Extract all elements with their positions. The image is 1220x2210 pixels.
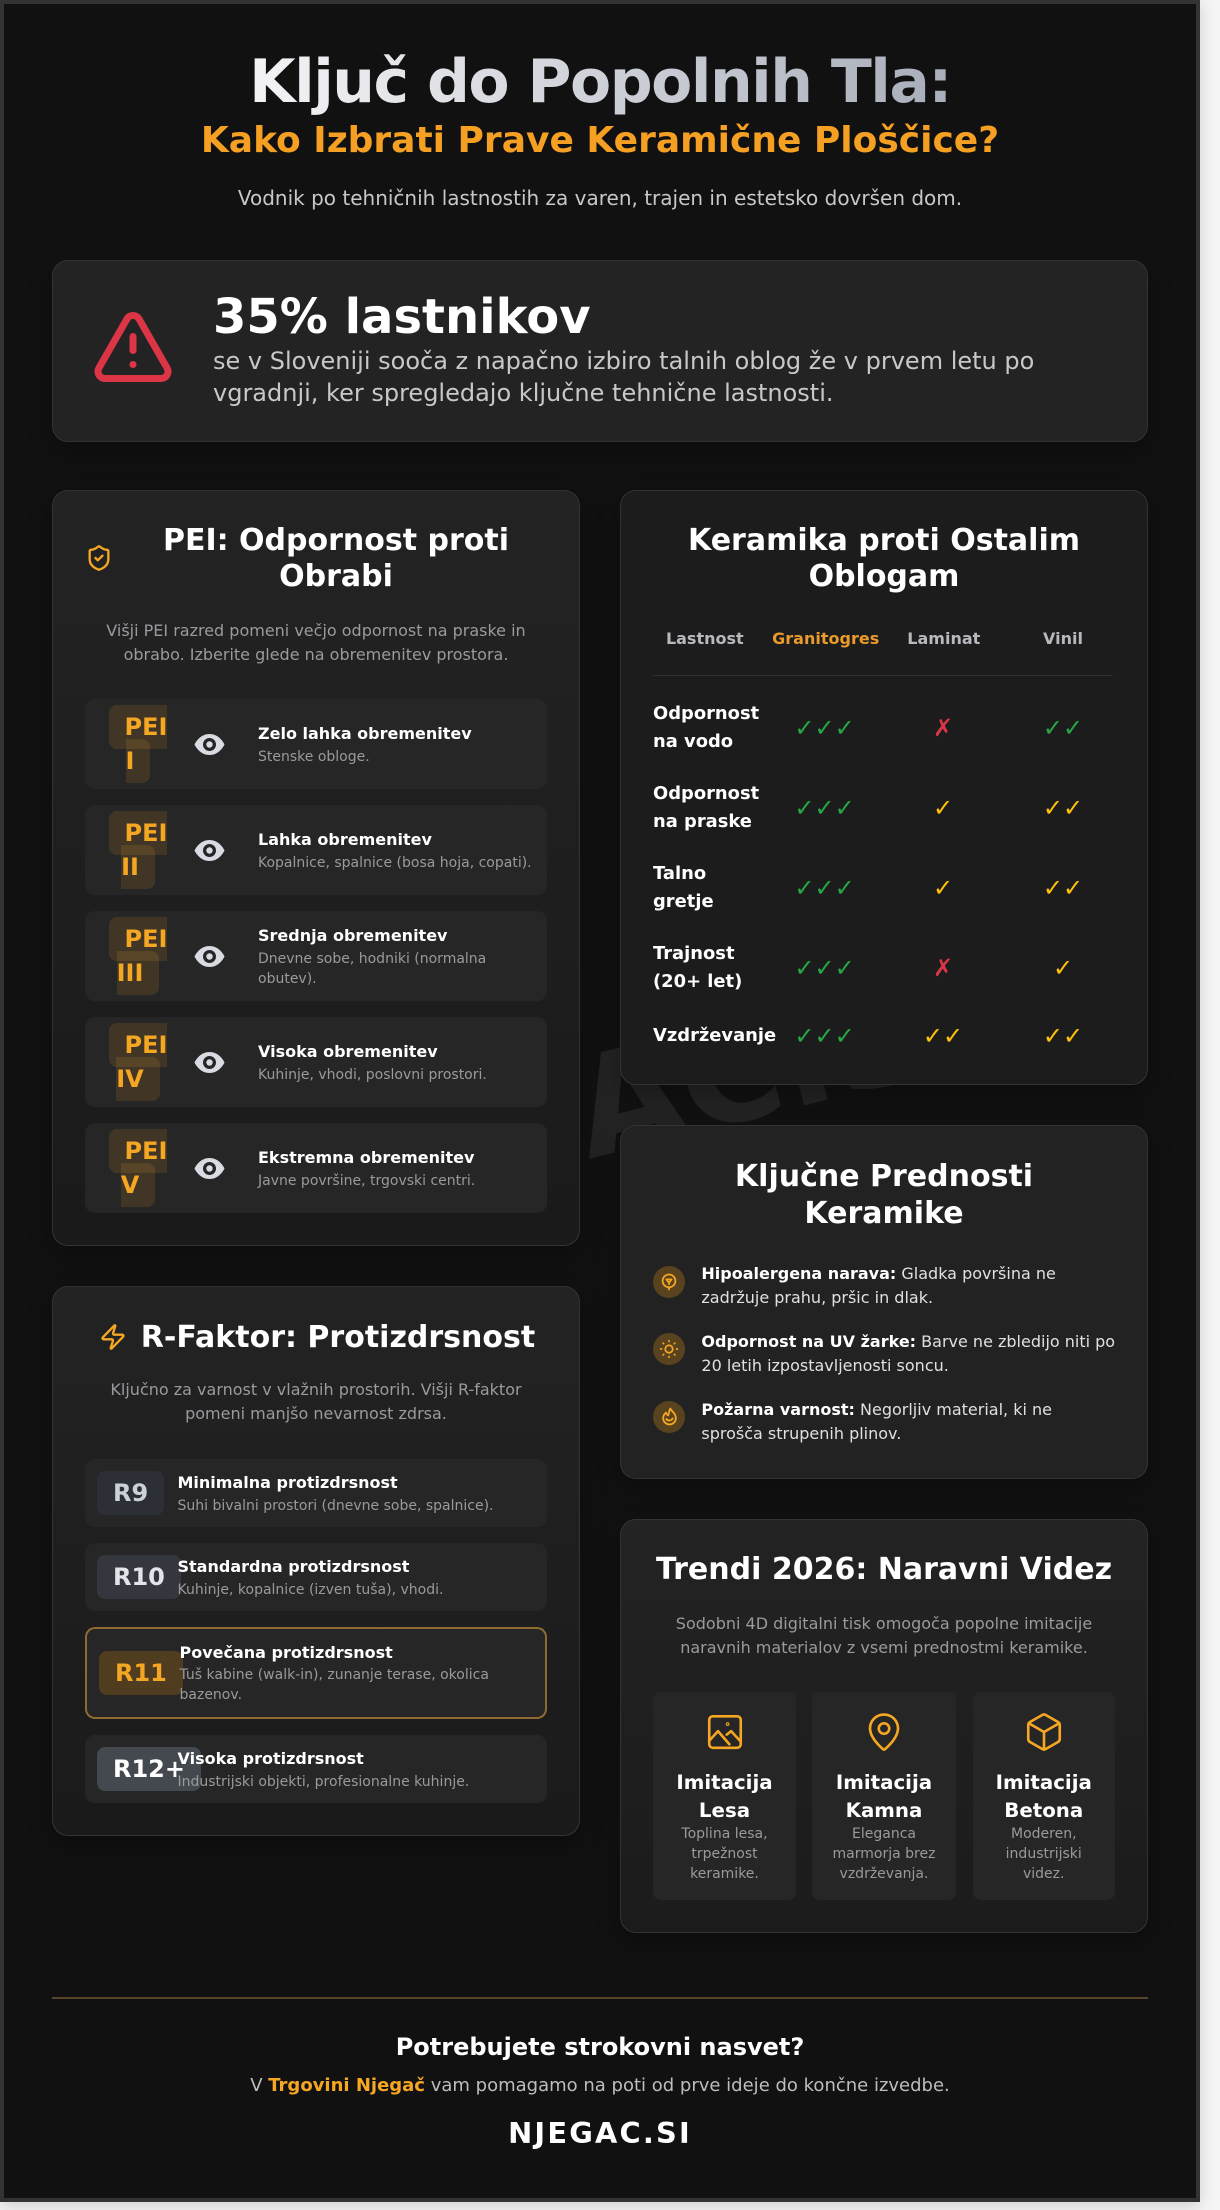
panel: PEI bbox=[52, 490, 580, 1246]
intro bbox=[676, 1614, 1092, 1657]
row label bbox=[653, 783, 759, 832]
row label bbox=[653, 863, 714, 912]
cell: ✗ bbox=[933, 714, 953, 742]
badge: PEI bbox=[125, 713, 167, 741]
statistic description: vgradnji, ker spregledajo ključne tehnične lastnosti. bbox=[213, 379, 834, 407]
badge bbox=[109, 811, 167, 889]
heading bbox=[735, 1159, 1033, 1231]
statistic description: se v Sloveniji sooča z napačno izbiro talnih oblog že v prvem letu po bbox=[213, 347, 1034, 375]
column header: Vinil bbox=[1043, 629, 1083, 648]
icon: shield bbox=[88, 545, 110, 571]
heading bbox=[163, 523, 509, 594]
badge: R11 bbox=[115, 1659, 167, 1687]
intro bbox=[110, 1380, 522, 1423]
badge: R9 bbox=[113, 1479, 148, 1507]
text: Visoka obremenitev bbox=[258, 1042, 438, 1061]
icon: eye bbox=[194, 1052, 224, 1073]
panel: R-factor bbox=[52, 1286, 580, 1836]
badge: V bbox=[121, 1171, 139, 1199]
title: Imitacija bbox=[996, 1771, 1092, 1794]
badge: I bbox=[126, 747, 134, 775]
description: vzdrževanja. bbox=[840, 1866, 928, 1882]
description: industrijski bbox=[1006, 1846, 1082, 1862]
panel: statistic alert bbox=[52, 260, 1148, 442]
R11 highlighted row bbox=[85, 1627, 547, 1719]
heading: Obrabi bbox=[279, 559, 393, 594]
description bbox=[681, 1826, 768, 1882]
text: Odpornost na UV žarke: Barve ne zbledijo niti po bbox=[701, 1332, 1115, 1350]
text: Hipoalergena narava: Gladka površina ne bbox=[701, 1264, 1056, 1283]
cell: ✓✓ bbox=[1043, 714, 1083, 742]
cell: ✓✓✓ bbox=[794, 954, 855, 982]
row label: (20+ let) bbox=[653, 971, 742, 992]
tile: stone bbox=[812, 1692, 956, 1900]
description: Toplina lesa, bbox=[681, 1826, 768, 1842]
row label: na praske bbox=[653, 811, 752, 832]
row label bbox=[653, 703, 759, 752]
description: bazenov. bbox=[180, 1687, 242, 1703]
footer bbox=[52, 1997, 1148, 2150]
text: sprošča strupenih plinov. bbox=[701, 1424, 901, 1443]
panel: comparison table bbox=[620, 490, 1148, 1085]
badge bbox=[97, 1471, 164, 1515]
description: Tuš kabine (walk-in), zunanje terase, okolica bbox=[180, 1667, 489, 1683]
cell: ✓✓ bbox=[923, 1022, 963, 1050]
badge bbox=[97, 1555, 181, 1599]
description: Dnevne sobe, hodniki (normalna bbox=[258, 951, 486, 967]
description: obutev). bbox=[258, 971, 317, 987]
statistic: 35% lastnikov bbox=[213, 289, 590, 345]
text: Minimalna protizdrsnost bbox=[178, 1473, 398, 1492]
cell: ✓✓✓ bbox=[794, 714, 855, 742]
badge bbox=[109, 1129, 167, 1207]
intro: pomeni manjšo nevarnost zdrsa. bbox=[185, 1404, 447, 1423]
text: Zelo lahka obremenitev bbox=[258, 724, 472, 743]
text: Lahka obremenitev bbox=[258, 830, 432, 849]
icon: eye bbox=[194, 840, 224, 861]
description: Stenske obloge. bbox=[258, 749, 370, 765]
badge: R12+ bbox=[113, 1755, 185, 1783]
icon: eye bbox=[194, 946, 224, 967]
text: Ekstremna obremenitev bbox=[258, 1148, 474, 1167]
row label: Odpornost bbox=[653, 783, 759, 804]
badge: PEI bbox=[125, 1137, 167, 1165]
badge bbox=[99, 1651, 183, 1695]
text: 20 letih izpostavljenosti soncu. bbox=[701, 1356, 949, 1374]
cell: ✓✓ bbox=[1043, 794, 1083, 822]
panel: trends bbox=[620, 1519, 1148, 1933]
icon: bolt bbox=[101, 1324, 125, 1350]
watermark: NJEGAC.SI bbox=[194, 935, 995, 1282]
description: Moderen, bbox=[1011, 1826, 1077, 1842]
title: Kamna bbox=[846, 1798, 922, 1822]
header rule bbox=[653, 675, 1113, 676]
icon: eye bbox=[194, 1158, 224, 1179]
title: Imitacija bbox=[836, 1771, 932, 1794]
text: Visoka protizdrsnost bbox=[178, 1749, 364, 1768]
intro line: Vodnik po tehničnih lastnostih za varen, trajen in estetsko dovršen dom. bbox=[238, 186, 962, 210]
title: Imitacija bbox=[676, 1771, 773, 1794]
intro bbox=[106, 621, 526, 664]
heading: Keramika proti Ostalim bbox=[688, 523, 1080, 558]
cell: ✓✓ bbox=[1043, 874, 1083, 902]
heading: Keramike bbox=[804, 1196, 964, 1231]
column header: Laminat bbox=[907, 629, 980, 648]
PEI II row bbox=[85, 805, 547, 895]
badge: R10 bbox=[113, 1563, 165, 1591]
badge: PEI bbox=[125, 819, 167, 847]
main title: Ključ do Popolnih Tla: bbox=[249, 47, 951, 117]
row label: Trajnost bbox=[653, 943, 734, 964]
intro: obrabo. Izberite glede na obremenitev prostora. bbox=[124, 645, 508, 664]
text: Srednja obremenitev bbox=[258, 926, 447, 945]
badge: PEI bbox=[125, 925, 167, 953]
row label: Odpornost bbox=[653, 703, 759, 724]
R9 row bbox=[85, 1459, 547, 1527]
text: Požarna varnost: Negorljiv material, ki ne bbox=[701, 1400, 1052, 1419]
title bbox=[836, 1771, 932, 1822]
footer rule bbox=[52, 1997, 1148, 1999]
badge bbox=[109, 917, 167, 995]
description: Suhi bivalni prostori (dnevne sobe, spalnice). bbox=[178, 1498, 494, 1514]
row label: na vodo bbox=[653, 731, 733, 752]
heading bbox=[688, 523, 1080, 594]
icon: hypoallergenic bbox=[653, 1266, 685, 1298]
column header: Lastnost bbox=[666, 629, 744, 648]
badge bbox=[109, 705, 167, 783]
row label: Talno bbox=[653, 863, 706, 884]
badge bbox=[109, 1023, 167, 1101]
PEI V row bbox=[85, 1123, 547, 1213]
cell: ✓ bbox=[1053, 954, 1073, 982]
text: Standardna protizdrsnost bbox=[178, 1557, 409, 1576]
intro: naravnih materialov z vsemi prednostmi keramike. bbox=[680, 1638, 1088, 1657]
PEI I row bbox=[85, 699, 547, 789]
text bbox=[701, 1264, 1056, 1307]
description: Kopalnice, spalnice (bosa hoja, copati). bbox=[258, 855, 532, 871]
intro: Ključno za varnost v vlažnih prostorih. Višji R-faktor bbox=[110, 1380, 522, 1399]
tile: wood bbox=[653, 1692, 796, 1900]
heading: Trendi 2026: Naravni Videz bbox=[656, 1552, 1112, 1587]
icon: warning triangle bbox=[94, 312, 172, 382]
badge: II bbox=[121, 853, 139, 881]
description bbox=[179, 1667, 489, 1703]
title: Lesa bbox=[699, 1798, 750, 1822]
title: Betona bbox=[1004, 1798, 1083, 1822]
title bbox=[676, 1771, 773, 1822]
subtitle: Kako Izbrati Prave Keramične Ploščice? bbox=[201, 120, 999, 161]
icon: eye bbox=[194, 734, 224, 755]
icon: box bbox=[1026, 1713, 1062, 1751]
cell: ✓ bbox=[933, 874, 953, 902]
badge bbox=[97, 1747, 201, 1791]
footer brand: NJEGAC.SI bbox=[508, 2116, 692, 2150]
description: videz. bbox=[1023, 1866, 1064, 1882]
PEI IV row bbox=[85, 1017, 547, 1107]
footer text: V Trgovini Njegač vam pomagamo na poti od prve ideje do končne izvedbe. bbox=[250, 2075, 950, 2096]
row label: gretje bbox=[653, 891, 714, 912]
description: keramike. bbox=[690, 1866, 759, 1882]
heading: Ključne Prednosti bbox=[735, 1159, 1033, 1194]
badge: IV bbox=[116, 1065, 144, 1093]
text bbox=[701, 1332, 1115, 1374]
column header: Granitogres bbox=[772, 629, 879, 648]
R12+ row bbox=[85, 1735, 547, 1803]
description: marmorja brez bbox=[833, 1846, 935, 1862]
description: Kuhinje, vhodi, poslovni prostori. bbox=[258, 1067, 487, 1083]
PEI III row bbox=[85, 911, 547, 1001]
text bbox=[701, 1400, 1052, 1443]
icon: image bbox=[708, 1715, 742, 1750]
cell: ✓✓✓ bbox=[794, 874, 855, 902]
cell: ✓✓✓ bbox=[794, 1022, 855, 1050]
description: Javne površine, trgovski centri. bbox=[258, 1173, 475, 1189]
heading: PEI: Odpornost proti bbox=[163, 523, 509, 558]
tile: concrete bbox=[972, 1692, 1115, 1900]
description: Eleganca bbox=[852, 1826, 916, 1842]
title bbox=[996, 1771, 1092, 1822]
text: zadržuje prahu, pršic in dlak. bbox=[701, 1288, 933, 1307]
description bbox=[258, 951, 486, 987]
description: trpežnost bbox=[691, 1846, 758, 1862]
row label: Vzdrževanje bbox=[653, 1025, 776, 1046]
cell: ✓✓✓ bbox=[794, 794, 855, 822]
panel: benefits bbox=[620, 1125, 1148, 1479]
badge: PEI bbox=[125, 1031, 167, 1059]
row label bbox=[653, 943, 742, 992]
icon: sun bbox=[653, 1333, 685, 1365]
footer heading: Potrebujete strokovni nasvet? bbox=[396, 2033, 804, 2061]
cell: ✗ bbox=[933, 954, 953, 982]
description bbox=[1006, 1826, 1082, 1882]
description bbox=[833, 1826, 935, 1882]
heading: Oblogam bbox=[809, 559, 959, 594]
icon: flame bbox=[653, 1401, 685, 1433]
statistic description bbox=[213, 347, 1034, 407]
text: Povečana protizdrsnost bbox=[180, 1642, 393, 1662]
icon: pin bbox=[868, 1713, 900, 1751]
description: Kuhinje, kopalnice (izven tuša), vhodi. bbox=[178, 1582, 443, 1598]
cell: ✓ bbox=[933, 794, 953, 822]
intro: Sodobni 4D digitalni tisk omogoča popolne imitacije bbox=[676, 1614, 1092, 1633]
cell: ✓✓ bbox=[1043, 1022, 1083, 1050]
badge: III bbox=[117, 959, 143, 987]
heading: R-Faktor: Protizdrsnost bbox=[141, 1320, 535, 1355]
R10 row bbox=[85, 1543, 547, 1611]
description: Industrijski objekti, profesionalne kuhinje. bbox=[178, 1774, 469, 1790]
intro: Višji PEI razred pomeni večjo odpornost na praske in bbox=[106, 621, 526, 640]
